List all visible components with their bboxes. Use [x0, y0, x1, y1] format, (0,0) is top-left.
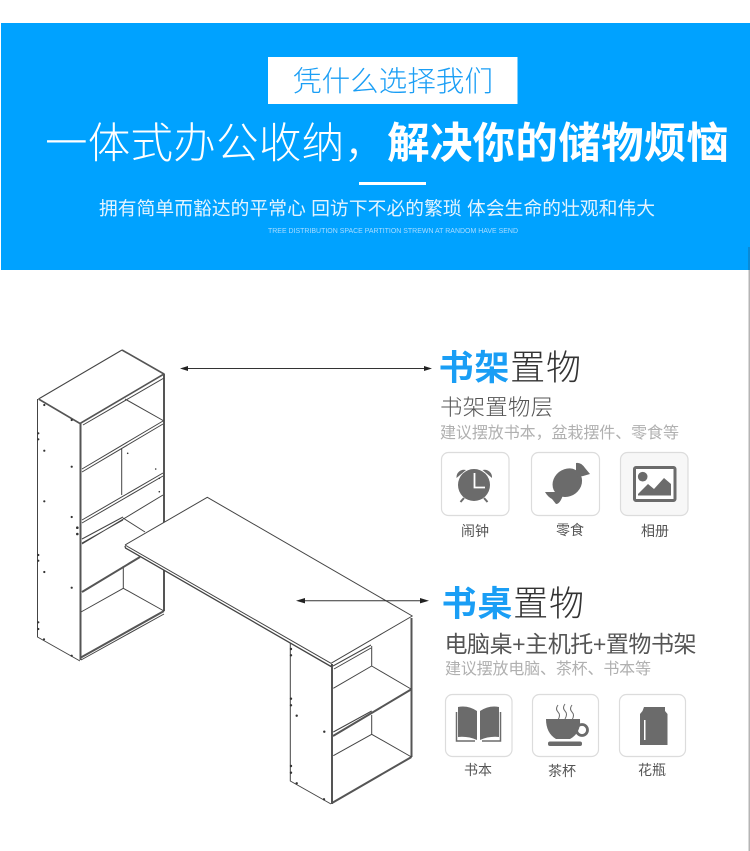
furniture drawing: [37, 350, 412, 804]
bookcase screw holes: [37, 404, 160, 657]
icon: book: [446, 694, 512, 756]
label: 茶杯: [548, 763, 576, 779]
icon: candy: [532, 452, 600, 516]
badge: why choose us: 凭什么选择我们: [293, 66, 493, 98]
bookcase: [38, 350, 164, 661]
badge: why choose us: [268, 57, 518, 104]
icon: alarm clock: [442, 452, 509, 516]
icon: jar: [620, 694, 686, 756]
panel: bookshelf storage: [438, 349, 688, 539]
panel: desk storage: [442, 585, 696, 779]
description: 建议摆放电脑、茶杯、书本等: [445, 660, 651, 678]
label: 闹钟: [461, 523, 489, 539]
headline: 一体式办公收纳，解决你的储物烦恼: [45, 121, 729, 168]
desk top: [125, 497, 412, 666]
subheading: 电脑桌+主机托+置物书架: [444, 631, 696, 657]
banner: [1, 23, 750, 270]
heading: bookshelf: 书架置物: [438, 349, 581, 388]
label: 书本: [464, 762, 492, 778]
arrow: bookshelf: [180, 366, 432, 371]
icon: tea cup: [532, 694, 598, 756]
english caption: TREE DISTRIBUTION SPACE PARTITION STREWN AT RANDOM HAVE SEND: [268, 226, 519, 235]
subtitle: 拥有简单而豁达的平常心 回访下不必的繁琐 体会生命的壮观和伟大: [99, 198, 655, 219]
arrow: desk: [296, 598, 429, 603]
heading: desk: 书桌置物: [442, 585, 584, 624]
desk leg: [290, 618, 412, 804]
icon: photo album: [620, 452, 688, 516]
label: 零食: [556, 522, 584, 538]
label: 花瓶: [638, 762, 666, 778]
label: 相册: [641, 523, 669, 539]
subheading: 书架置物层: [440, 395, 553, 420]
description: 建议摆放书本，盆栽摆件、零食等: [440, 424, 679, 442]
